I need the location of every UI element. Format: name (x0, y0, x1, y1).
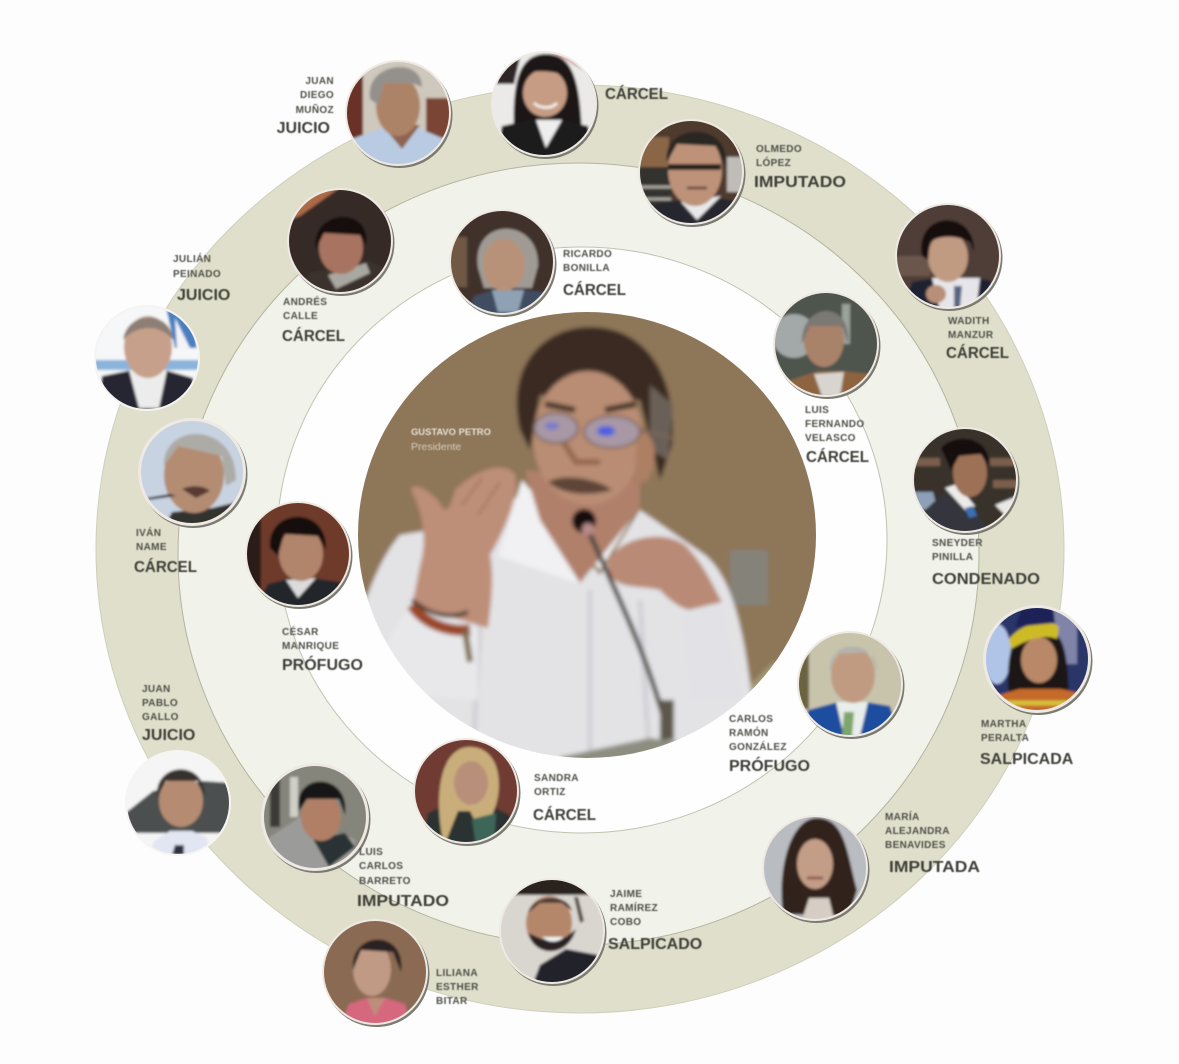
portrait: Iván Name (137, 417, 248, 528)
portrait: Juan Diego Muñoz (343, 58, 453, 168)
label: Iván Name: NAME (136, 542, 167, 553)
label: Olmedo López: LÓPEZ (756, 156, 791, 169)
label: Jaime Ramírez Cobo: RAMÍREZ (610, 901, 658, 914)
label: Juan Diego Muñoz: JUICIO (277, 120, 330, 137)
label: Luis Carlos Barreto: LUIS (359, 847, 383, 858)
label: Sandra Ortiz (533, 773, 596, 824)
portrait: Martha Peralta (982, 604, 1092, 715)
label: Julián Peinado: JULIÁN (173, 252, 211, 265)
mustache and mouth (548, 477, 612, 494)
right hand (607, 537, 722, 611)
label: Jaime Ramírez Cobo (608, 889, 702, 953)
label: Sneyder Pinilla: CONDENADO (932, 571, 1040, 588)
label: Juan Pablo Gallo: JUAN (142, 684, 171, 695)
label: Liliana Esther Bitar: BITAR (436, 996, 468, 1007)
portrait: Carlos Ramón González (795, 629, 905, 739)
label: César Manrique: CÉSAR (282, 625, 319, 638)
central photo: Gustavo Petro (350, 305, 830, 770)
label: Juan Pablo Gallo: GALLO (142, 712, 179, 723)
label: Julián Peinado: JUICIO (177, 287, 230, 304)
portrait: woman, top (489, 49, 599, 159)
concentric rings (96, 85, 1064, 1013)
label: Iván Name (134, 526, 197, 576)
label: Ricardo Bonilla: RICARDO (563, 249, 612, 260)
portrait: Olmedo López (636, 117, 746, 227)
label: Wadith Manzur (946, 316, 1009, 362)
name caption: Gustavo Petro: Presidente (411, 441, 461, 453)
label: Martha Peralta: PERALTA (981, 733, 1029, 744)
label: Julián Peinado: PEINADO (173, 269, 221, 280)
label: Carlos Ramón González: GONZÁLEZ (729, 740, 787, 753)
label: María Alejandra Benavides: ALEJANDRA (885, 826, 950, 837)
label: Juan Diego Muñoz (277, 76, 334, 137)
portrait: Juan Pablo Gallo (123, 748, 233, 858)
label: Juan Diego Muñoz: DIEGO (300, 90, 334, 101)
hair (517, 327, 673, 480)
label: Luis Carlos Barreto: BARRETO (359, 876, 411, 887)
label: Juan Diego Muñoz: JUAN (305, 76, 334, 87)
label: Luis Carlos Barreto (357, 847, 449, 910)
label: Iván Name: CÁRCEL (134, 557, 197, 576)
glasses (534, 413, 578, 443)
portrait: César Manrique (243, 499, 353, 609)
label: Martha Peralta: MARTHA (981, 719, 1026, 730)
label: Sneyder Pinilla: PINILLA (932, 552, 973, 563)
name caption: Gustavo Petro (411, 426, 491, 453)
label: Jaime Ramírez Cobo: JAIME (610, 889, 642, 900)
label: Liliana Esther Bitar (436, 968, 479, 1007)
label: Wadith Manzur: CÁRCEL (946, 343, 1009, 362)
label: Carlos Ramón González: CARLOS (729, 714, 773, 725)
raised hand (411, 467, 516, 628)
label: Liliana Esther Bitar: ESTHER (436, 982, 479, 993)
label: Wadith Manzur: WADITH (948, 316, 990, 327)
label: Andrés Calle: CALLE (283, 311, 318, 322)
label: Luis Fernando Velasco: VELASCO (805, 433, 856, 444)
label: Juan Pablo Gallo (142, 684, 195, 744)
portrait: Andrés Calle (285, 186, 395, 296)
portrait: Ricardo Bonilla (447, 207, 557, 317)
label: Andrés Calle (282, 295, 345, 345)
portrait: Sneyder Pinilla (910, 425, 1020, 535)
label: Carlos Ramón González (729, 714, 810, 775)
label: Sneyder Pinilla: SNEYDER (932, 538, 983, 549)
label: Ricardo Bonilla: BONILLA (563, 263, 610, 274)
label: Andrés Calle: ANDRÉS (283, 295, 327, 308)
label: Juan Diego Muñoz: MUÑOZ (296, 103, 334, 116)
portrait: Luis Fernando Velasco (771, 289, 881, 399)
portrait: Julián Peinado (92, 303, 202, 413)
label: Olmedo López: IMPUTADO (754, 174, 846, 191)
label: César Manrique (282, 625, 363, 674)
label: Andrés Calle: CÁRCEL (282, 326, 345, 345)
bracelets and keys (412, 605, 470, 630)
label: Sandra Ortiz: ORTIZ (534, 787, 566, 798)
label: Sandra Ortiz: SANDRA (534, 773, 579, 784)
portrait: María Alejandra Benavides (760, 813, 870, 923)
label: Sandra Ortiz: CÁRCEL (533, 805, 596, 824)
label: Sneyder Pinilla (932, 538, 1040, 588)
label: Olmedo López: OLMEDO (756, 144, 802, 155)
label: César Manrique: PRÓFUGO (282, 655, 363, 674)
label: Jaime Ramírez Cobo: SALPICADO (608, 936, 702, 953)
label: María Alejandra Benavides: MARÍA (885, 810, 920, 823)
label: Olmedo López (754, 144, 846, 191)
label: Carlos Ramón González: RAMÓN (729, 726, 769, 739)
label: Martha Peralta: SALPICADA (980, 751, 1074, 768)
microphone (586, 532, 664, 714)
label: Juan Pablo Gallo: JUICIO (142, 727, 195, 744)
portrait: Sandra Ortiz (411, 736, 521, 846)
label: Luis Fernando Velasco: LUIS (805, 405, 829, 416)
label: Julián Peinado (173, 252, 230, 304)
label: María Alejandra Benavides: IMPUTADA (889, 859, 980, 876)
label: Ricardo Bonilla: CÁRCEL (563, 280, 626, 299)
label: María Alejandra Benavides (885, 810, 980, 876)
face (533, 371, 643, 505)
label: Luis Fernando Velasco (805, 405, 869, 466)
label: Jaime Ramírez Cobo: COBO (610, 917, 641, 928)
label: Luis Fernando Velasco: CÁRCEL (806, 447, 869, 466)
portrait: Luis Carlos Barreto (260, 762, 370, 873)
label: César Manrique: MANRIQUE (282, 641, 339, 652)
label: Luis Carlos Barreto: CARLOS (359, 861, 403, 872)
portrait: Liliana Esther Bitar (320, 917, 430, 1027)
label: María Alejandra Benavides: BENAVIDES (885, 840, 946, 851)
name caption: Gustavo Petro: GUSTAVO PETRO (411, 426, 491, 437)
label: Juan Pablo Gallo: PABLO (142, 698, 178, 709)
label: Liliana Esther Bitar: LILIANA (436, 968, 478, 979)
label: Carlos Ramón González: PRÓFUGO (729, 756, 810, 775)
label: top woman status: CÁRCEL (605, 84, 668, 103)
portrait: Jaime Ramírez Cobo (497, 876, 607, 986)
neck (525, 470, 640, 583)
raised forearm sleeve (472, 639, 479, 700)
label: Ricardo Bonilla (563, 249, 626, 299)
label: Wadith Manzur: MANZUR (948, 330, 994, 341)
label: Iván Name: IVÁN (136, 526, 161, 539)
label: Luis Carlos Barreto: IMPUTADO (357, 893, 449, 910)
shirt (352, 490, 752, 770)
label: Luis Fernando Velasco: FERNANDO (805, 419, 864, 430)
portrait: Wadith Manzur (893, 201, 1003, 311)
label: Martha Peralta (980, 719, 1074, 768)
